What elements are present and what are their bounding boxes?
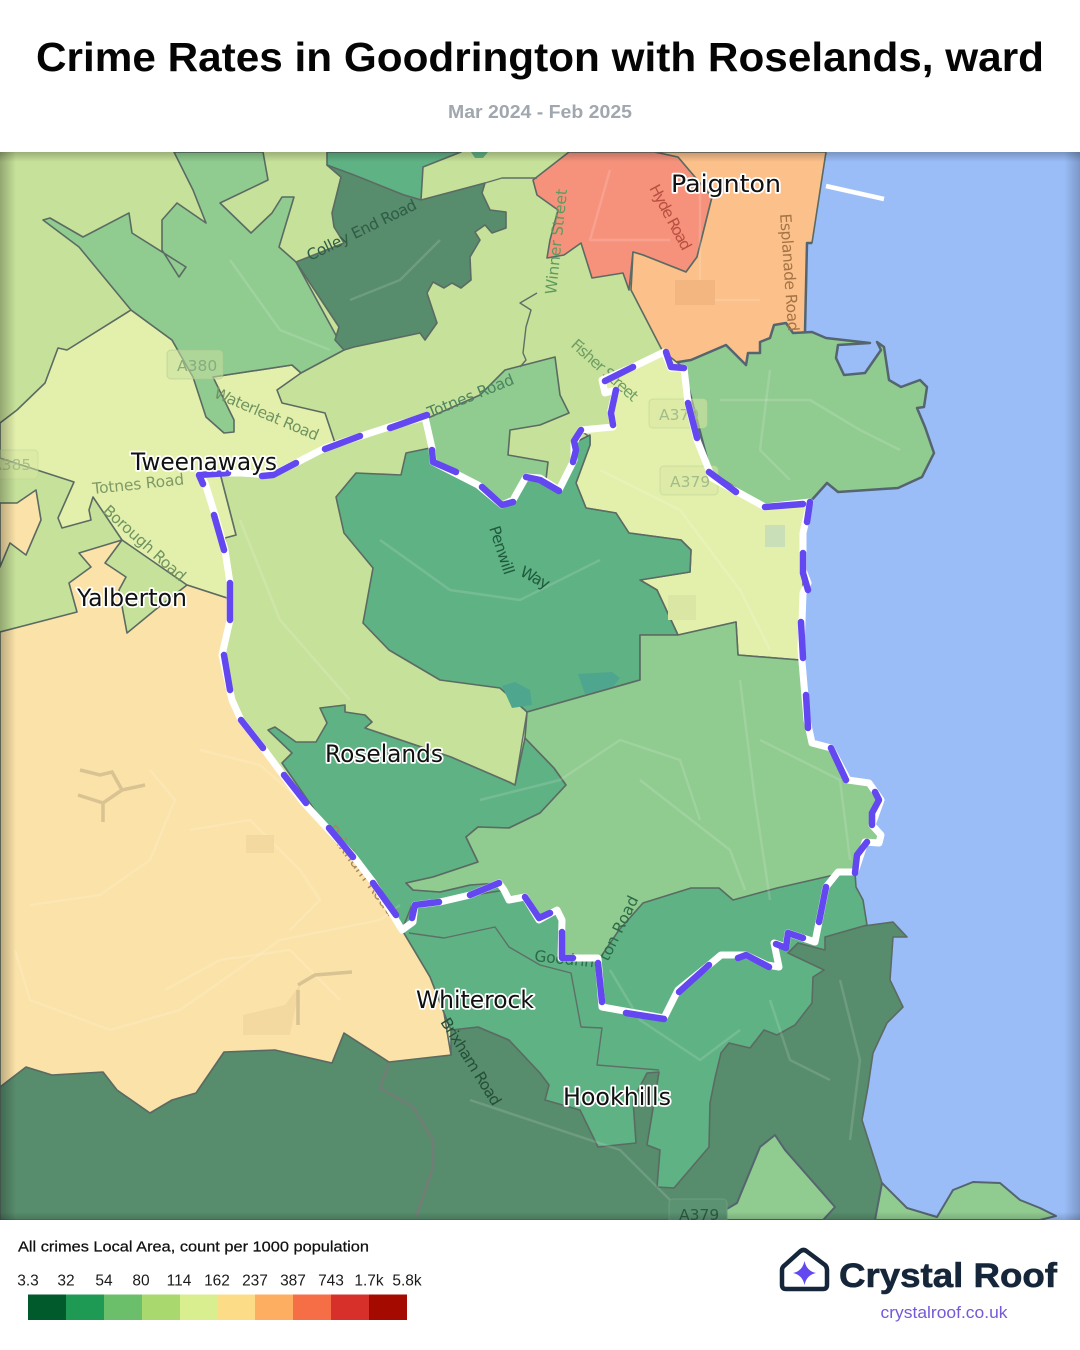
ward boundary: purple dashes (199, 352, 879, 1019)
road labels: Borough Road (99, 502, 189, 585)
road labels (91, 181, 802, 1109)
faint road network (15, 170, 900, 1210)
place labels (76, 170, 781, 1111)
areas: land polygons (0, 152, 1056, 1220)
logo: Crystal Roof (782, 1250, 1058, 1322)
road labels: Colley End Road (304, 196, 420, 265)
railway station markers and small building patches (78, 280, 785, 1035)
icon: house with star (782, 1250, 827, 1289)
legend scale labels: 237 (242, 1272, 268, 1290)
road labels: Brixham Road (437, 1015, 505, 1109)
legend scale labels: 1.7k (354, 1272, 384, 1290)
legend scale labels: 743 (318, 1272, 344, 1290)
legend scale labels (17, 1272, 422, 1290)
map edge shadow (0, 152, 1080, 1220)
district boundary lines (220, 178, 812, 1217)
road labels: Way (517, 563, 553, 593)
legend colour bar (28, 1294, 407, 1320)
legend (17, 1238, 422, 1320)
sea background (450, 152, 1080, 1220)
legend scale labels: 387 (280, 1272, 306, 1290)
place labels: Hookhills (563, 1083, 671, 1111)
place labels: Whiterock (416, 986, 534, 1014)
road shields: A379 (679, 1206, 719, 1224)
road labels: Totnes Road (424, 371, 517, 422)
legend scale labels: 32 (57, 1272, 75, 1290)
panel: choropleth map (0, 152, 1080, 1228)
road labels: Fisher Street (567, 336, 642, 405)
website url: crystalroof.co.uk (880, 1304, 1008, 1322)
road labels: Totnes Road (91, 470, 185, 498)
ward boundary: white base line (199, 352, 881, 1018)
road labels: Esplanade Road (776, 213, 802, 332)
title: Crime Rates in Goodrington with Roselands, ward (36, 34, 1044, 80)
legend scale labels: 162 (204, 1272, 230, 1290)
road shields (0, 350, 727, 1228)
legend scale labels: 3.3 (17, 1272, 39, 1290)
legend scale labels: 5.8k (392, 1272, 422, 1290)
road labels: Waterleat Road (211, 384, 322, 444)
subtitle: date range: Mar 2024 - Feb 2025 (448, 101, 632, 122)
road labels: Penwill (485, 524, 518, 577)
road shields: A379 (659, 406, 699, 424)
road labels: Hyde Road (645, 181, 695, 253)
road labels: Goodrin (534, 947, 595, 971)
place labels: Paignton (671, 170, 781, 198)
road shields: A379 (670, 473, 710, 491)
legend scale labels: 80 (132, 1272, 150, 1290)
logo wordmark: Crystal Roof (839, 1257, 1058, 1295)
pier (826, 186, 884, 199)
legend scale labels: 54 (95, 1272, 113, 1290)
road shields: A380 (177, 357, 217, 375)
place labels: Tweenaways (130, 448, 277, 476)
road labels: ton Road (595, 893, 642, 964)
road labels: Brixham Road (323, 822, 401, 920)
place labels: Roselands (325, 740, 443, 768)
legend scale labels: 114 (167, 1272, 192, 1290)
road labels: Winner Street (542, 188, 571, 295)
legend title: All crimes Local Area, count per 1000 population (18, 1238, 369, 1256)
place labels: Yalberton (76, 584, 187, 612)
